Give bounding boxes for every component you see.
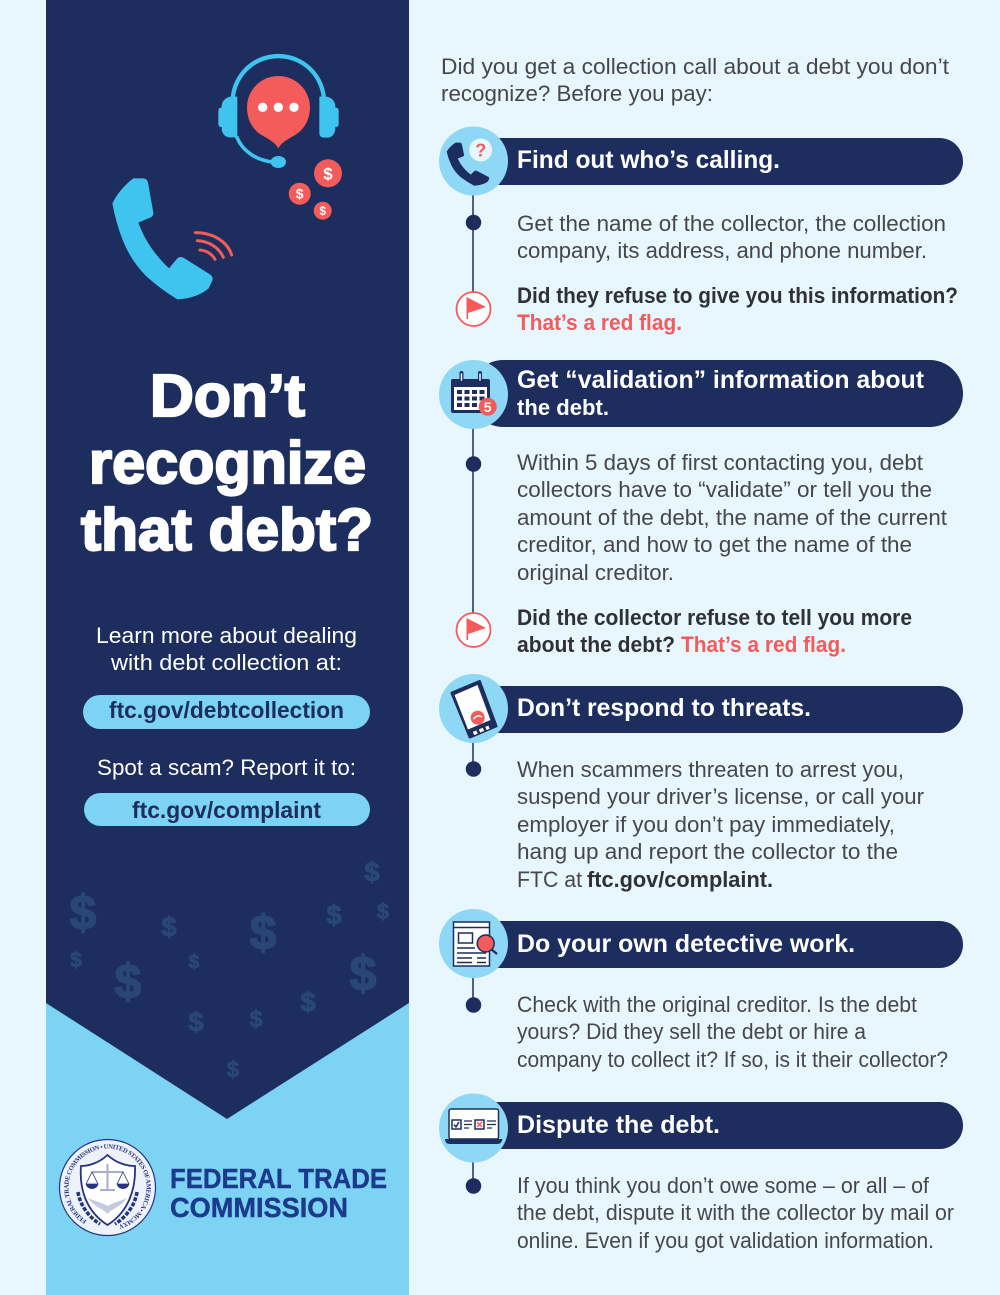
step 4: detective work	[439, 909, 963, 1072]
body text: FTC at	[517, 867, 582, 892]
icon: document with magnifier	[439, 909, 508, 978]
body text: company to collect it? If so, is it their collector?	[517, 1047, 948, 1072]
body text: suspend your driver’s license, or call your	[517, 784, 924, 809]
body text: Within 5 days of first contacting you, debt	[517, 450, 923, 475]
FTC wordmark: COMMISSION	[170, 1192, 348, 1223]
FTC seal: FEDERAL TRADE COMMISSION • UNITED STATES OF AMERICA • MCMXV	[64, 1144, 151, 1230]
heading bar: Don’t respond to threats.	[517, 694, 811, 722]
intro text	[441, 54, 949, 106]
heading bar	[470, 686, 963, 733]
link pill: complaint: ftc.gov/complaint	[132, 797, 321, 823]
heading bar: Get “validation” information about	[517, 366, 925, 394]
background dollar signs: $	[250, 907, 277, 960]
background dollar signs: $	[300, 987, 316, 1017]
text: learn more: Learn more about dealing	[96, 623, 357, 648]
background dollar signs	[70, 857, 389, 1082]
body text: collectors have to “validate” or tell you the	[517, 477, 932, 502]
body text	[517, 1173, 954, 1253]
link pill: debt collection: ftc.gov/debtcollection	[109, 697, 344, 723]
heading bar	[470, 138, 963, 185]
icon: smartphone	[439, 674, 508, 743]
body text: Get the name of the collector, the collection	[517, 211, 946, 236]
title: recognize	[89, 430, 366, 496]
background dollar signs: $	[227, 1057, 239, 1082]
red flag text: That’s a red flag.	[517, 310, 682, 335]
FTC wordmark	[170, 1163, 387, 1223]
icon: telephone handset with signal	[112, 178, 232, 299]
intro text: Did you get a collection call about a debt you don’t	[441, 54, 949, 79]
body text: original creditor.	[517, 560, 674, 585]
title: Don’t	[150, 363, 305, 429]
intro text: recognize? Before you pay:	[441, 81, 713, 106]
body text	[517, 757, 924, 892]
body text	[517, 211, 946, 263]
red flag text: Did they refuse to give you this information?	[517, 283, 958, 308]
body text: the debt, dispute it with the collector by mail or	[517, 1200, 954, 1225]
icon: red dollar coins	[289, 159, 342, 220]
background dollar signs: $	[326, 900, 342, 930]
background dollar signs: $	[189, 952, 200, 973]
heading bar: Find out who’s calling.	[517, 146, 780, 174]
body text: ftc.gov/complaint.	[587, 867, 773, 892]
body text	[517, 450, 947, 585]
heading bar	[470, 1102, 963, 1149]
link pill: debt collection	[83, 695, 370, 729]
heading bar: the debt.	[517, 395, 609, 420]
body text: yours? Did they sell the debt or hire a	[517, 1019, 867, 1044]
background dollar signs: $	[364, 857, 380, 887]
background dollar signs: $	[70, 887, 97, 940]
text: learn more: with debt collection at:	[110, 650, 342, 675]
step 3: threats	[439, 674, 963, 892]
body text: creditor, and how to get the name of the	[517, 532, 912, 557]
icon: laptop with checkboxes	[439, 1094, 508, 1162]
background dollar signs: $	[115, 956, 142, 1009]
icon: phone with question mark: ?	[475, 140, 486, 160]
body text: Check with the original creditor. Is the debt	[517, 992, 917, 1017]
icon: red flag	[456, 292, 490, 326]
text: learn more	[96, 623, 357, 675]
FTC wordmark: FEDERAL TRADE	[170, 1163, 387, 1194]
body text: When scammers threaten to arrest you,	[517, 757, 904, 782]
body text: online. Even if you got validation information.	[517, 1228, 934, 1253]
heading bar: Dispute the debt.	[517, 1111, 720, 1139]
heading bar	[470, 360, 963, 427]
icon: phone with question mark	[439, 126, 508, 196]
body text: employer if you don’t pay immediately,	[517, 812, 895, 837]
background dollar signs: $	[161, 912, 177, 942]
body text: If you think you don’t owe some – or all – of	[517, 1173, 930, 1198]
icon: red dollar coins: $	[323, 164, 333, 184]
icon: red dollar coins: $	[319, 206, 326, 218]
red flag text: Did the collector refuse to tell you more	[517, 605, 912, 630]
panel: left sidebar	[46, 0, 409, 1295]
link pill: complaint	[84, 793, 370, 826]
title: that debt?	[81, 497, 373, 563]
body text: hang up and report the collector to the	[517, 839, 898, 864]
step 5: dispute	[439, 1094, 963, 1253]
icon: calendar	[439, 360, 508, 429]
body text	[517, 992, 948, 1072]
icon: headset with speech bubble	[218, 56, 339, 168]
step 1: find out who's calling	[439, 126, 963, 335]
red flag text: about the debt?	[517, 632, 675, 657]
red flag text	[517, 605, 912, 657]
step 2: validation	[439, 360, 963, 657]
heading bar	[470, 921, 963, 968]
background dollar signs: $	[350, 948, 377, 1001]
red flag text	[517, 283, 958, 335]
background dollar signs: $	[377, 899, 389, 924]
icon: red dollar coins: $	[296, 186, 304, 202]
background dollar signs: $	[188, 1007, 204, 1037]
background dollar signs: $	[250, 1006, 263, 1032]
timeline connectors	[466, 190, 480, 1193]
background dollar signs: $	[70, 949, 82, 972]
title	[81, 363, 373, 563]
heading bar: Do your own detective work.	[517, 930, 855, 958]
red flag text: That’s a red flag.	[681, 632, 846, 657]
body text: company, its address, and phone number.	[517, 238, 927, 263]
body text: amount of the debt, the name of the current	[517, 505, 947, 530]
icon: red flag	[456, 613, 490, 647]
icon: calendar: 5	[484, 399, 492, 415]
text: spot a scam: Spot a scam? Report it to:	[97, 755, 356, 780]
